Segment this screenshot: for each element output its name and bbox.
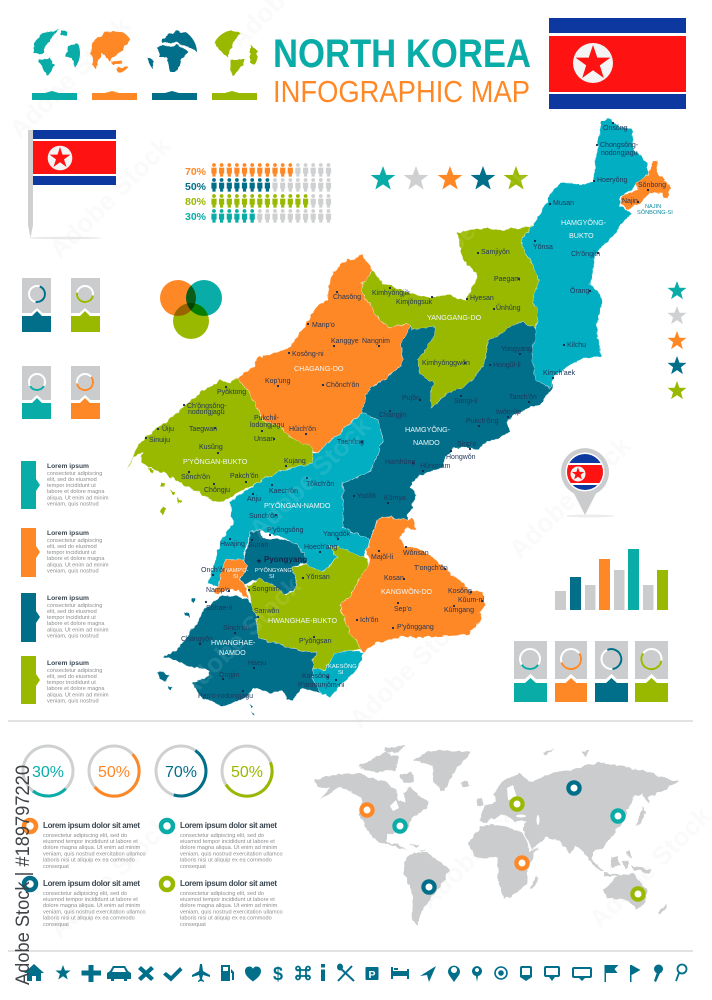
islands xyxy=(148,468,254,716)
donut 30%: 30% xyxy=(32,764,64,781)
city markers and names: Ch'ŏngsŏng- xyxy=(187,403,227,410)
city markers and names: Kŭmya xyxy=(384,495,406,502)
item: orange: consectetur adipiscing elit, sed do xyxy=(43,833,127,839)
city markers and names: Yongyang xyxy=(501,346,532,353)
left text blocks xyxy=(21,461,109,704)
icon: navigate xyxy=(420,966,436,982)
watermark over map: Adobe Stock xyxy=(243,410,377,544)
city markers and names: Sinp'o xyxy=(457,441,476,448)
province: P'yŏngan-namdo xyxy=(208,413,383,587)
donut 30% xyxy=(23,746,73,796)
city markers and names: Musan xyxy=(553,200,574,207)
item: green: consequat xyxy=(180,922,206,928)
city markers and names: Unsan xyxy=(254,436,274,443)
city markers and names: Sangi-li xyxy=(454,398,478,405)
block: orange: Lorem ipsum xyxy=(47,530,89,537)
item: orange: eiusmod tempor incididunt ut labore et xyxy=(43,839,138,845)
label: Najin Sŏnbong-si: NAJIN xyxy=(645,204,661,210)
province: Yanggang-do xyxy=(362,222,539,407)
city markers and names: Wŏnsan xyxy=(403,550,429,557)
city markers and names xyxy=(145,122,666,700)
donut 50% green xyxy=(222,746,272,796)
watermark pattern on background: Adobe Stock xyxy=(43,130,177,264)
item: teal xyxy=(161,820,283,870)
item: orange: laboris nisi ut aliquip ex ea commodo xyxy=(43,858,135,864)
city markers and names: Kimhyŏngjik xyxy=(372,290,410,297)
block: dark teal: Lorem ipsum xyxy=(47,595,89,602)
city markers and names: Pujŏn xyxy=(402,395,420,402)
globe: dark teal xyxy=(148,31,198,72)
province names: HWANGHAE- xyxy=(211,638,256,647)
block: teal: labore et dolore magna xyxy=(47,489,105,495)
city markers and names: Pap'o-rodongjagu xyxy=(198,693,253,700)
icon: magnifier xyxy=(676,964,686,981)
item: green: veniam, quis nostrud exercitation ullamco xyxy=(180,910,283,916)
lorem text list xyxy=(24,820,283,928)
donut 70% xyxy=(156,746,206,796)
globe: green xyxy=(214,29,258,77)
icon: wide speech bubble xyxy=(572,967,592,981)
item: orange: consequat xyxy=(43,864,69,870)
province: P'yŏngyang xyxy=(240,530,307,595)
block: teal: veniam, quis nostrud xyxy=(47,502,99,508)
city markers and names: P'yŏnggang xyxy=(397,624,434,631)
icon: car xyxy=(107,966,131,981)
city markers and names: Sŏhae-ri xyxy=(206,605,233,612)
icon: speech bubble xyxy=(544,966,560,981)
city markers and names: Sŏnch'ŏn xyxy=(181,474,210,481)
block: teal: tempor incididunt ut xyxy=(47,483,96,489)
province names: CHAGANG-DO xyxy=(294,364,344,373)
item: green: laboris nisi ut aliquip ex ea commodo xyxy=(180,916,272,922)
flag: large xyxy=(549,18,686,109)
cards: right row xyxy=(514,641,668,702)
icon: star xyxy=(55,965,71,979)
label: Najin Sŏnbong-si: SŎNBONG-SI xyxy=(637,209,673,216)
item: green: consectetur adipiscing elit, sed do xyxy=(180,891,264,897)
province names: NAMP'O- xyxy=(225,568,249,574)
icon: heart xyxy=(245,966,261,982)
icon: check xyxy=(163,967,182,982)
icon: plane xyxy=(192,964,210,982)
province names: SI xyxy=(233,574,239,580)
card: green xyxy=(71,278,100,332)
bar chart xyxy=(555,549,668,610)
icon: parking: P xyxy=(368,969,376,981)
city markers and names: Paegam xyxy=(494,276,520,283)
provinces xyxy=(128,119,670,716)
stars column xyxy=(668,281,686,399)
city markers and names: Kilchu xyxy=(567,342,586,349)
city markers and names: Iwŏn-ŭp xyxy=(496,409,521,416)
item: green: eiusmod tempor incididunt ut labore et xyxy=(180,897,275,903)
block: teal xyxy=(21,461,109,509)
province: Hwanghae-namdo xyxy=(163,595,320,707)
province names: BUKTO xyxy=(569,231,594,240)
donut 70%: 70% xyxy=(165,764,197,781)
icon: fuel xyxy=(221,965,234,981)
row 30%: 30% xyxy=(185,211,207,223)
province names: KANGWŎN-DO xyxy=(381,587,433,596)
city markers and names: Ongjin xyxy=(219,672,239,679)
province names: YANGGANG-DO xyxy=(427,313,482,322)
city markers and names: Sinch'ŏn xyxy=(223,625,250,632)
city markers and names: Najin xyxy=(622,198,638,205)
city markers and names: Kop'ung xyxy=(265,378,291,385)
label: Najin Sŏnbong-si xyxy=(637,204,673,216)
block: teal: consectetur adipiscing xyxy=(47,471,102,477)
city markers and names: Kanggye xyxy=(331,338,359,345)
city markers and names: Manp'o xyxy=(312,322,335,329)
row 70%: 70% xyxy=(185,166,207,178)
icon: home xyxy=(24,964,44,981)
row 30% xyxy=(185,209,331,223)
item: orange: Lorem ipsum dolor sit amet xyxy=(43,821,140,830)
item: dark teal: Lorem ipsum dolor sit amet xyxy=(43,879,140,888)
city markers and names: Hamhŭng xyxy=(385,459,415,466)
row 80%: 80% xyxy=(185,196,207,208)
item: teal: Lorem ipsum dolor sit amet xyxy=(180,821,277,830)
block: green: labore et dolore magna xyxy=(47,686,105,692)
city markers and names: Hŭngnam xyxy=(420,463,451,470)
block: dark teal: aliqua. Ut enim ad minim xyxy=(47,628,109,634)
item: teal: consectetur adipiscing elit, sed do xyxy=(180,833,264,839)
globes row xyxy=(32,29,258,100)
item: dark teal xyxy=(24,878,146,928)
block: green xyxy=(21,656,109,704)
city markers and names: Tanch'ŏn xyxy=(509,394,537,401)
city markers and names: Hyesan xyxy=(470,295,494,302)
item: dark teal: consectetur adipiscing elit, sed do xyxy=(43,891,127,897)
city markers and names: Chongsŏng- xyxy=(600,142,639,149)
row 50%: 50% xyxy=(185,181,207,193)
province names: HAMGYŎNG- xyxy=(405,425,451,434)
city markers and names: Nangnim xyxy=(362,338,390,345)
block: orange: veniam, quis nostrud xyxy=(47,568,99,574)
city markers and names: Chŏnch'ŏn xyxy=(326,382,359,389)
city markers and names: Kŭum-ni xyxy=(458,597,485,604)
city markers and names: Ŭnhŭng xyxy=(496,303,521,312)
item: orange: dolore magna aliqua. Ut enim ad minim xyxy=(43,845,141,851)
city markers and names: Kŭmgang xyxy=(444,607,474,614)
city markers and names: Yodŏk xyxy=(357,493,377,500)
city markers and names: T'ongch'ŏn xyxy=(414,565,448,572)
icon: fork and knife xyxy=(337,964,354,981)
icon: command xyxy=(296,966,310,980)
card: dark teal xyxy=(595,641,628,702)
icon: map pointer xyxy=(654,964,663,982)
card: teal xyxy=(514,641,547,702)
city markers and names: Majŏl-li xyxy=(371,554,394,561)
city markers and names: Kusŭng xyxy=(199,444,223,451)
city markers and names: P'yŏngsŏng xyxy=(267,527,303,534)
item: dark teal: dolore magna aliqua. Ut enim ad minim xyxy=(43,903,141,909)
city markers and names: Hwajing xyxy=(220,541,245,548)
watermark pattern on background: Adobe Stock xyxy=(343,600,477,734)
item: orange: veniam, quis nostrud exercitation ullamco xyxy=(43,852,146,858)
province names: SI xyxy=(338,670,344,676)
block: green: veniam, quis nostrud xyxy=(47,698,99,704)
watermark pattern on background: Adobe Stock xyxy=(503,430,637,564)
city markers and names: Pyŏktong xyxy=(217,389,246,396)
block: dark teal: tempor incididunt ut xyxy=(47,615,96,621)
city markers and names: Yangdŏk xyxy=(323,531,351,538)
city markers and names: Kimch'aek xyxy=(543,370,576,377)
city markers and names: Songnim xyxy=(252,586,280,593)
globe stands xyxy=(32,91,77,100)
icon: flag xyxy=(604,965,618,982)
block: green: elit, sed do eiusmod xyxy=(47,674,97,680)
title: NORTH KOREA xyxy=(273,32,531,76)
city markers and names: Ich'ŏn xyxy=(360,617,379,624)
city markers and names: Haeju xyxy=(248,660,266,667)
donut 50% green: 50% xyxy=(231,764,263,781)
icon row xyxy=(24,964,686,984)
city markers and names: Kaech'ŏn xyxy=(269,488,298,495)
province names xyxy=(183,218,607,676)
city markers and names: Hongŭl-li xyxy=(493,362,521,369)
city markers and names: Changjin xyxy=(379,412,407,419)
block: dark teal: veniam, quis nostrud xyxy=(47,634,99,640)
province names: P'YŎNGAN-BUKTO xyxy=(183,457,248,466)
city markers and names: Hoeryŏng xyxy=(597,177,627,184)
row 70% xyxy=(185,163,331,178)
block: green: Lorem ipsum xyxy=(47,660,89,667)
row 80% xyxy=(185,194,331,208)
province names: NAMDO xyxy=(413,438,440,447)
province: Hamgyŏng-namdo xyxy=(343,320,553,540)
item: teal: dolore magna aliqua. Ut enim ad minim xyxy=(180,845,278,851)
city markers and names: Pakch'ŏn xyxy=(230,473,259,480)
city markers and names: Hongwŏn xyxy=(446,454,476,461)
watermark over map: Adobe Stock xyxy=(403,160,537,294)
map of North Korea xyxy=(128,119,673,716)
city markers and names: Kimjŏngsuk xyxy=(396,299,433,306)
block: green: tempor incididunt ut xyxy=(47,680,96,686)
city markers and names: Ŭiju xyxy=(162,424,174,433)
stock id watermark: Adobe Stock | #189797220 xyxy=(12,765,34,985)
icon: cross xyxy=(138,966,154,981)
city markers and names: Kaesŏng xyxy=(302,673,330,680)
province names: SI xyxy=(269,574,275,580)
city markers and names: Ch'ŏngjin xyxy=(571,251,600,258)
map markers xyxy=(361,782,644,900)
city markers and names: Hŭich'ŏn xyxy=(289,426,316,433)
block: green: consectetur adipiscing xyxy=(47,668,102,674)
block: orange: elit, sed do eiusmod xyxy=(47,544,97,550)
province names: NAMDO xyxy=(219,648,246,657)
item: teal: veniam, quis nostrud exercitation ullamco xyxy=(180,852,283,858)
city markers and names: Chasŏng xyxy=(333,294,361,301)
flag on pole xyxy=(28,130,116,239)
block: orange: aliqua. Ut enim ad minim xyxy=(47,562,109,568)
block: dark teal: elit, sed do eiusmod xyxy=(47,609,97,615)
watermark over map xyxy=(173,160,537,704)
donut 50%: 50% xyxy=(98,764,130,781)
province: Hamgyŏng-bukto xyxy=(520,119,649,388)
city markers and names: Changyŏn xyxy=(181,636,213,643)
city markers and names: Sep'o xyxy=(394,606,412,613)
block: teal: Lorem ipsum xyxy=(47,463,89,470)
province: P'yŏngan-bukto xyxy=(128,378,313,502)
venn diagram xyxy=(160,280,222,339)
item: green: dolore magna aliqua. Ut enim ad minim xyxy=(180,903,278,909)
inland seas xyxy=(390,785,540,827)
watermark over map: Adobe Stock xyxy=(213,230,347,364)
city markers and names: Kosŏng-ni xyxy=(292,351,324,358)
world map xyxy=(315,745,678,925)
city markers and names: P'yŏngsan xyxy=(299,638,332,645)
row 50% xyxy=(185,178,331,193)
card: orange xyxy=(555,641,587,702)
province names: P'YŎNGYANG xyxy=(255,567,292,574)
block: dark teal: consectetur adipiscing xyxy=(47,603,102,609)
item: dark teal: consequat xyxy=(43,922,69,928)
block: teal: elit, sed do eiusmod xyxy=(47,477,97,483)
city markers and names: Tŏkch'ŏn xyxy=(306,481,334,488)
city markers and names: Kosan xyxy=(384,575,404,582)
city markers and names: Onsŏng xyxy=(603,125,628,132)
block: orange: tempor incididunt ut xyxy=(47,550,96,556)
city markers and names: Sinuiju xyxy=(149,437,170,444)
pictogram chart xyxy=(185,163,331,223)
icon: pennant xyxy=(630,965,640,982)
block: dark teal xyxy=(21,593,109,642)
city markers and names: Taegwan xyxy=(189,426,217,433)
icon: pin xyxy=(448,966,460,982)
item: teal: eiusmod tempor incididunt ut labore et xyxy=(180,839,275,845)
block: orange: labore et dolore magna xyxy=(47,556,105,562)
province: Namp'o xyxy=(213,560,248,600)
province: Kangwŏn-do xyxy=(340,517,485,653)
city markers and names: nodongjagu xyxy=(601,150,638,157)
province: Kaesŏng xyxy=(313,650,363,698)
globe: teal xyxy=(33,29,82,77)
city markers and names: P'anmunjŏm-ni xyxy=(298,682,345,689)
cards: left top pair xyxy=(22,278,100,419)
province: Najin Sŏnbong xyxy=(620,160,670,210)
city markers and names: Sariwŏn xyxy=(254,608,279,615)
block: teal: aliqua. Ut enim ad minim xyxy=(47,496,109,502)
icon: plus xyxy=(82,965,101,982)
city markers and names: Sŏnbong xyxy=(638,182,666,189)
city markers and names: lodongjagu xyxy=(250,422,284,429)
province names: P'YŎNGAN-NAMDO xyxy=(264,501,331,510)
province names: KAESŎNG xyxy=(328,663,357,670)
card: teal xyxy=(22,366,51,419)
watermark over map: Adobe Stock xyxy=(173,570,307,704)
watermark pattern on background: Adobe Stock xyxy=(3,10,137,144)
city markers and names: Chŏngju xyxy=(204,487,230,494)
province names: HWANGHAE-BUKTO xyxy=(268,616,337,625)
icon: info xyxy=(321,964,325,981)
province names: HAMGYŎNG- xyxy=(561,218,607,227)
card: dark teal xyxy=(22,278,51,332)
watermark pattern on background: Adobe Stock xyxy=(43,810,177,944)
icon: small pin xyxy=(472,966,482,982)
item: orange xyxy=(24,820,146,870)
city markers and names: nodongjagu xyxy=(188,409,225,416)
icon: bed xyxy=(391,967,409,979)
city markers and names: Onch'ŏn xyxy=(201,567,227,574)
city markers and names: Kosŏng xyxy=(448,588,472,595)
item: teal: laboris nisi ut aliquip ex ea commodo xyxy=(180,858,272,864)
city markers and names: Namp'o xyxy=(206,587,230,594)
city markers and names: Sunan xyxy=(248,542,268,549)
stars row xyxy=(371,166,528,190)
block: orange xyxy=(21,528,109,577)
capital: Pyongyang: Pyongyang xyxy=(264,555,307,564)
item: teal: consequat xyxy=(180,864,206,870)
icon: tag pin xyxy=(520,966,532,981)
city markers and names: Samjiyŏn xyxy=(481,249,510,256)
globe: orange xyxy=(90,31,134,73)
province: Chagang-do xyxy=(237,253,410,453)
city markers and names: Yŏnsa xyxy=(533,244,553,251)
city markers and names: Ŏrang xyxy=(570,286,590,295)
location pin with flag xyxy=(561,448,614,518)
icon: target pin xyxy=(495,967,507,979)
city markers and names: Anju xyxy=(247,496,261,503)
continents xyxy=(315,745,678,925)
item: dark teal: veniam, quis nostrud exercitation ullamco xyxy=(43,910,146,916)
city markers and names: Taehŭng xyxy=(337,439,364,446)
item: dark teal: laboris nisi ut aliquip ex ea commodo xyxy=(43,916,135,922)
city markers and names: Sunch'ŏn xyxy=(249,513,278,520)
block: green: aliqua. Ut enim ad minim xyxy=(47,692,109,698)
item: green: Lorem ipsum dolor sit amet xyxy=(180,879,277,888)
city markers and names: Hoech'ang xyxy=(304,544,337,551)
city markers and names: Kujang xyxy=(284,458,306,465)
item: green xyxy=(161,878,283,928)
block: dark teal: labore et dolore magna xyxy=(47,621,105,627)
icon: dollar: $ xyxy=(273,964,283,984)
province: Hwanghae-bukto xyxy=(247,545,369,670)
city markers and names: Yŏnsan xyxy=(306,574,330,581)
watermark pattern on background: Adobe Stock xyxy=(513,170,647,304)
donut 50% xyxy=(89,746,139,796)
city markers and names: Pukchil- xyxy=(254,415,280,422)
city markers and names: Kimhyŏnggwŏn xyxy=(422,360,470,367)
card: green xyxy=(635,641,668,702)
block: orange: consectetur adipiscing xyxy=(47,538,102,544)
city markers and names: Pukch'ŏng xyxy=(466,418,499,425)
item: dark teal: eiusmod tempor incididunt ut labore et xyxy=(43,897,138,903)
card: orange xyxy=(71,366,100,419)
icon: parking xyxy=(366,967,378,981)
donut charts xyxy=(23,746,272,796)
subtitle: INFOGRAPHIC MAP xyxy=(273,74,530,109)
watermark pattern on background: Adobe Stock xyxy=(413,780,547,914)
